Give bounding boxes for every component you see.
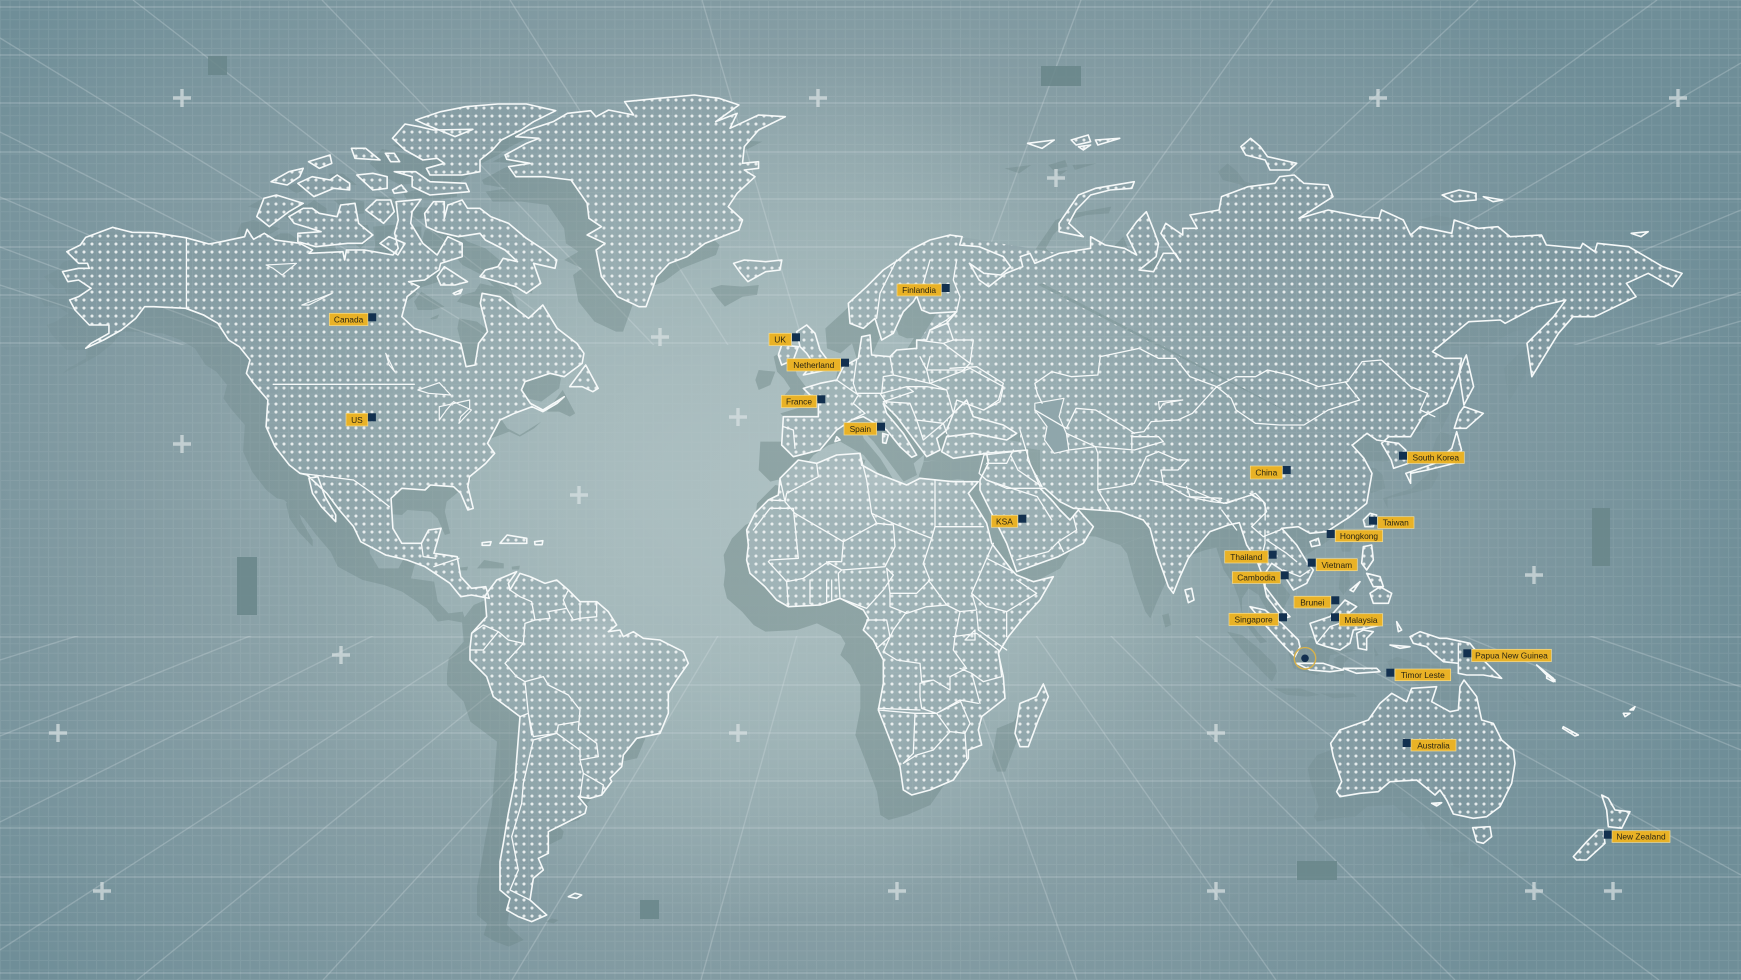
label: Hongkong [1327, 530, 1383, 542]
label: South Korea [1399, 452, 1464, 463]
country borders [186, 238, 1458, 900]
label: Taiwan: Taiwan [1383, 518, 1409, 528]
label: Canada [329, 313, 376, 326]
label: Brunei: Brunei [1300, 597, 1325, 607]
label: KSA [991, 515, 1026, 527]
label: China [1250, 466, 1291, 479]
label: Thailand: Thailand [1230, 552, 1263, 562]
label: Australia [1403, 739, 1456, 751]
label: France [781, 395, 825, 408]
label: Canada: Canada [334, 315, 364, 325]
label: New Zealand: New Zealand [1616, 832, 1666, 842]
marker: Jakarta highlight [1294, 648, 1316, 669]
label: Spain: Spain [850, 424, 871, 434]
label: Netherland: Netherland [793, 360, 835, 370]
panel: world map [62, 94, 1683, 922]
label: China: China [1255, 468, 1278, 478]
label: Cambodia [1232, 571, 1289, 583]
label: Netherland [787, 359, 849, 371]
label: France: France [786, 397, 812, 407]
label: Timor Leste [1386, 669, 1451, 681]
label: Finlandia [897, 284, 950, 296]
label: UK [769, 333, 800, 346]
label: KSA: KSA [996, 516, 1013, 526]
label: Thailand [1225, 551, 1277, 563]
label: Timor Leste: Timor Leste [1401, 670, 1445, 680]
country labels [329, 284, 1670, 842]
label: New Zealand [1604, 831, 1670, 842]
label: Brunei [1294, 596, 1339, 608]
label: Singapore: Singapore [1235, 615, 1273, 625]
label: Singapore [1229, 613, 1287, 626]
inland lakes and seas [266, 263, 1183, 453]
label: Papua New Guinea: Papua New Guinea [1475, 651, 1548, 661]
label: Taiwan [1369, 517, 1414, 528]
label: South Korea: South Korea [1413, 453, 1459, 463]
label: Vietnam: Vietnam [1322, 560, 1352, 570]
label: Malaysia [1331, 613, 1383, 626]
label: Cambodia: Cambodia [1237, 573, 1276, 583]
decorative dark blocks [208, 56, 1610, 919]
dotted land fill [66, 98, 1678, 918]
label: US [346, 413, 376, 426]
label: Malaysia: Malaysia [1344, 615, 1378, 625]
label: US: US [351, 415, 363, 425]
label: Finlandia: Finlandia [902, 285, 936, 295]
label: Spain [844, 423, 885, 435]
plus markers [49, 89, 1687, 900]
label: Australia: Australia [1417, 740, 1450, 750]
label: Hongkong: Hongkong [1340, 531, 1378, 541]
land shadow [101, 132, 1382, 946]
land base fill [65, 102, 1638, 910]
coastlines [62, 95, 1682, 922]
label: UK: UK [774, 335, 786, 345]
label: Vietnam [1308, 559, 1357, 571]
label: Papua New Guinea [1463, 649, 1551, 662]
